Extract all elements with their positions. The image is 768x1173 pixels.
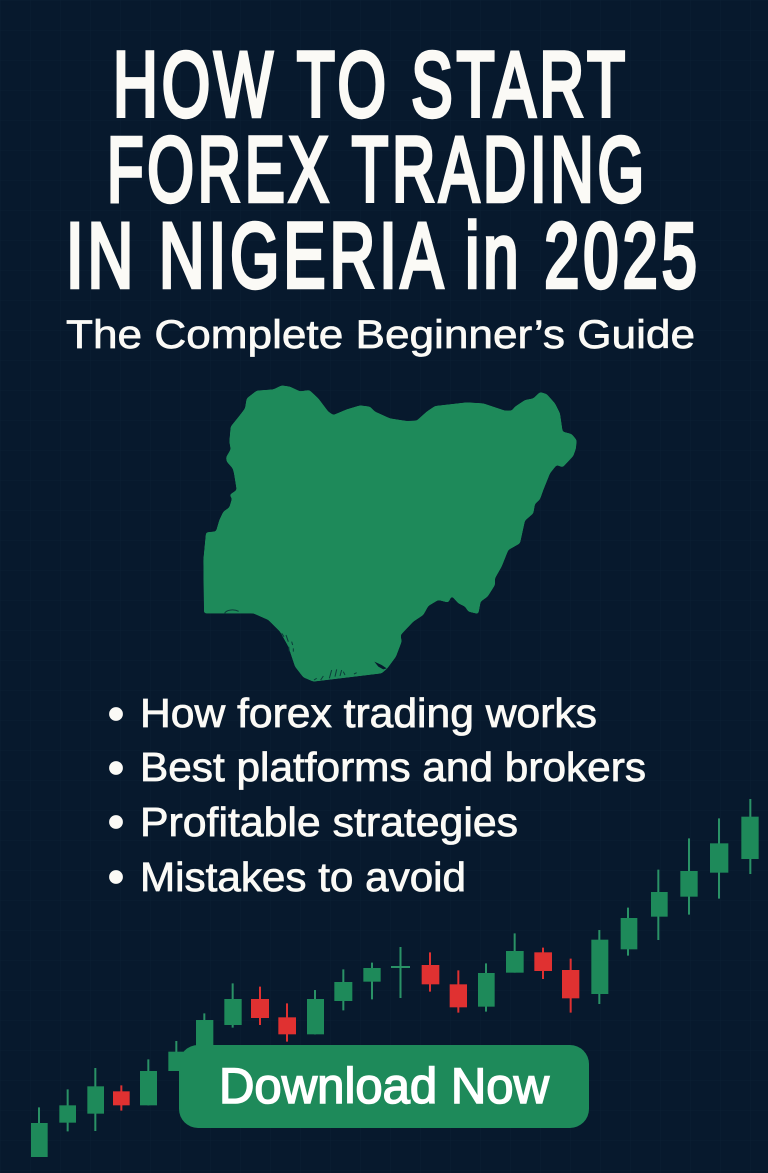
bullet list: Mistakes to avoid <box>140 854 466 900</box>
candlestick chart <box>31 799 759 1157</box>
bullet list <box>110 690 646 900</box>
bullet list: Profitable strategies <box>140 799 518 845</box>
title <box>66 34 701 307</box>
download button: Download Now <box>219 1058 550 1114</box>
download button <box>179 1045 589 1128</box>
bullet list: Best platforms and brokers <box>140 744 646 790</box>
bullet list: How forex trading works <box>140 690 597 736</box>
map: Nigeria <box>203 385 577 682</box>
subtitle: The Complete Beginner’s Guide <box>66 313 695 357</box>
